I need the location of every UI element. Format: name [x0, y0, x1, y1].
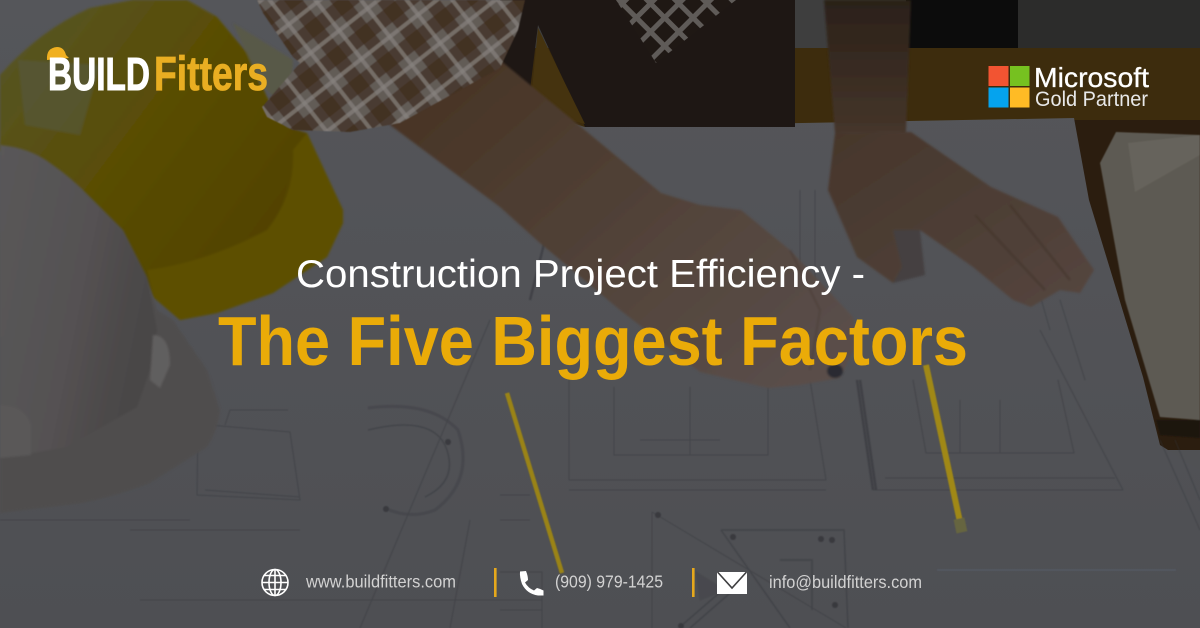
logo: BuildFitters: Fitters	[154, 48, 268, 101]
subtitle line: Construction Project Efficiency -	[296, 253, 865, 296]
brim of yellow hat	[147, 133, 343, 320]
icon: globe	[262, 570, 288, 596]
logo: BuildFitters	[47, 47, 268, 101]
title	[218, 253, 968, 380]
footer contact bar	[262, 568, 922, 597]
white hard hat	[0, 145, 220, 513]
partner wordmark: Microsoft	[1034, 62, 1149, 93]
pencils	[507, 365, 967, 573]
website text: www.buildfitters.com	[305, 572, 456, 592]
wall and table behind	[500, 0, 1200, 450]
main heading: The Five Biggest Factors	[218, 302, 968, 380]
divider bar	[692, 568, 695, 597]
divider bar	[494, 568, 497, 597]
icon: Microsoft squares	[988, 66, 1030, 108]
right arm and hand	[824, 0, 1094, 307]
phone text: (909) 979-1425	[555, 572, 663, 592]
logo: Microsoft Gold Partner	[988, 62, 1149, 111]
apron and torso	[500, 0, 795, 127]
paper stack at right	[1100, 132, 1200, 438]
icon: envelope	[717, 572, 747, 594]
icon: hard hat	[47, 47, 69, 60]
icon: phone	[520, 571, 544, 596]
left arm and hand	[390, 60, 856, 388]
blueprint line drawings	[0, 190, 1200, 628]
logo: Microsoft Gold Partner: Gold Partner	[1035, 88, 1148, 111]
logo wordmark: BUILD	[48, 48, 150, 100]
plaid shirt sleeve	[257, 0, 525, 132]
yellow hard hat	[0, 0, 343, 320]
email text: info@buildfitters.com	[769, 572, 922, 592]
